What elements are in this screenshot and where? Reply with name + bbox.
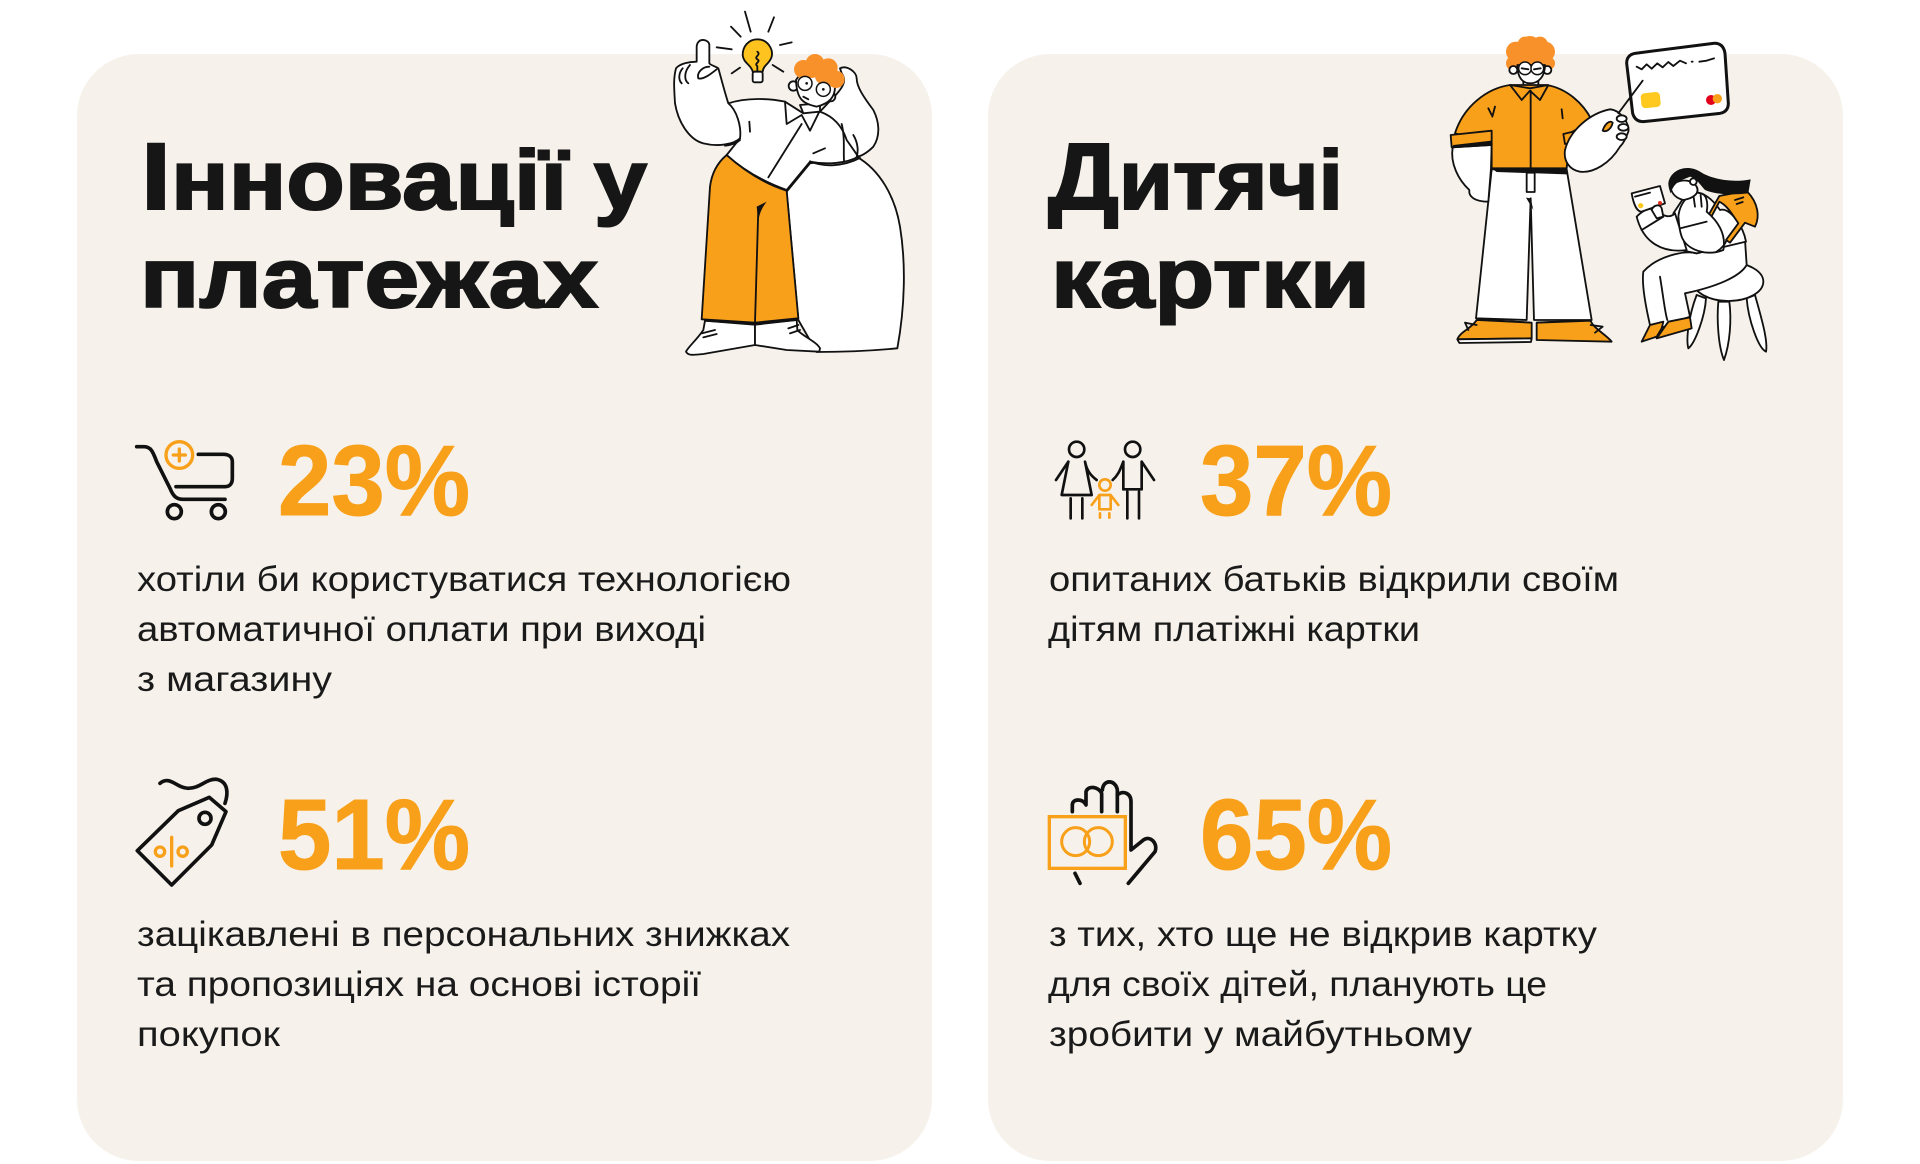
text: plan to open: зробити у майбутньому xyxy=(1049,1015,1473,1054)
text: auto payment: з магазину xyxy=(137,660,333,699)
text: parents opened cards: опитаних батьків відкрили своїм xyxy=(1049,560,1619,599)
text: parents opened cards xyxy=(1048,560,1619,649)
text: personal discounts: зацікавлені в персональних знижках xyxy=(137,915,791,954)
panel background left xyxy=(77,54,932,1161)
text: auto payment: автоматичної оплати при виході xyxy=(137,610,706,649)
heading: children's cards: Дитячі xyxy=(1048,124,1343,230)
illustration: man with idea and light bulb xyxy=(674,12,904,355)
stat: 37%: 37% xyxy=(1200,425,1392,537)
text: auto payment xyxy=(137,560,791,699)
illustration: father with card and girl on stool xyxy=(1451,36,1766,360)
stat: 65%: 65% xyxy=(1200,779,1392,891)
text: personal discounts xyxy=(137,915,791,1054)
text: parents opened cards: дітям платіжні картки xyxy=(1048,610,1420,649)
icon: discount price tag xyxy=(137,779,227,885)
heading: children's cards xyxy=(1048,124,1370,325)
stat: 51%: 51% xyxy=(278,779,470,891)
heading: payment innovations xyxy=(140,124,647,325)
text: auto payment: хотіли би користуватися технологією xyxy=(137,560,791,599)
heading: payment innovations: платежах xyxy=(140,231,598,325)
text: personal discounts: та пропозиціях на основі історії xyxy=(137,965,701,1004)
heading: children's cards: картки xyxy=(1051,231,1370,325)
icon: hand holding card xyxy=(1049,782,1156,883)
icon: family with child xyxy=(1056,442,1154,518)
panel background right xyxy=(988,54,1843,1161)
text: plan to open: з тих, хто ще не відкрив картку xyxy=(1049,915,1598,954)
heading: payment innovations: Інновації у xyxy=(141,124,647,230)
text: plan to open: для своїх дітей, планують це xyxy=(1048,965,1547,1004)
text: personal discounts: покупок xyxy=(137,1015,281,1054)
text: plan to open xyxy=(1048,915,1598,1054)
panel: children's cards xyxy=(988,36,1843,1161)
panel: payment innovations xyxy=(77,12,932,1161)
icon: shopping cart with plus xyxy=(137,442,232,519)
stat: 23%: 23% xyxy=(278,425,470,537)
